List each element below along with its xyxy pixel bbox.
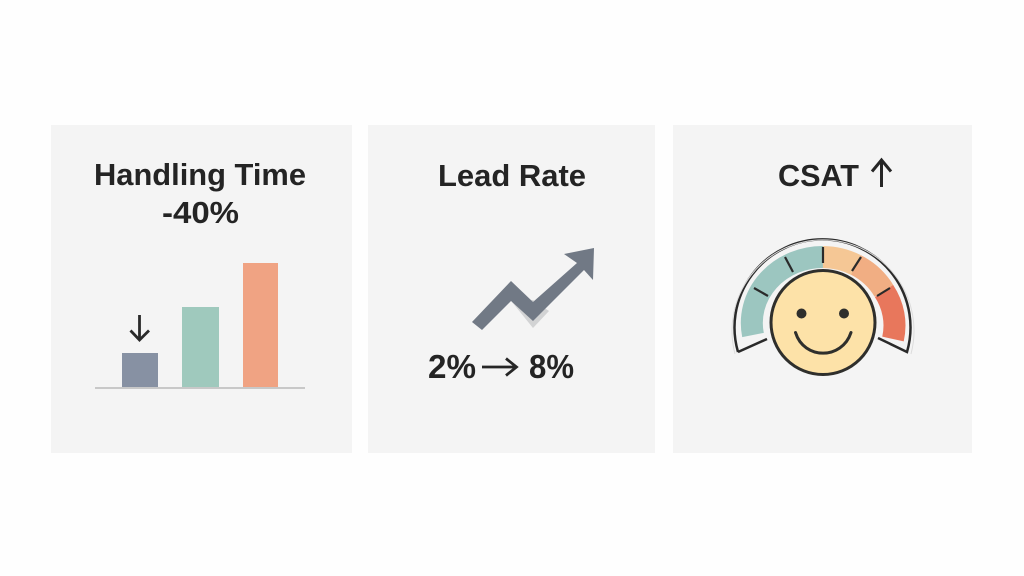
heading: csat: CSAT — [778, 158, 859, 193]
gauge — [732, 239, 914, 374]
icon: up arrow — [872, 160, 891, 187]
metric: 2 percent to 8 percent: 8% — [529, 348, 574, 385]
heading: handling time: Handling Time — [94, 157, 306, 192]
smiley face — [771, 270, 875, 374]
icon: rising arrow — [472, 248, 594, 330]
gauge colour bands — [752, 257, 894, 339]
gauge ticks — [754, 247, 890, 296]
metric: minus 40 percent: -40% — [162, 195, 239, 230]
panel: lead rate — [368, 125, 655, 453]
panel: handling time — [51, 125, 352, 453]
heading: lead rate: Lead Rate — [438, 158, 586, 193]
metric: 2 percent to 8 percent — [428, 348, 574, 385]
bar chart — [95, 263, 305, 389]
panel: csat — [673, 125, 972, 453]
metric: 2 percent to 8 percent: 2% — [428, 348, 476, 385]
icon: down arrow — [130, 315, 149, 340]
gauge outline — [734, 239, 911, 352]
